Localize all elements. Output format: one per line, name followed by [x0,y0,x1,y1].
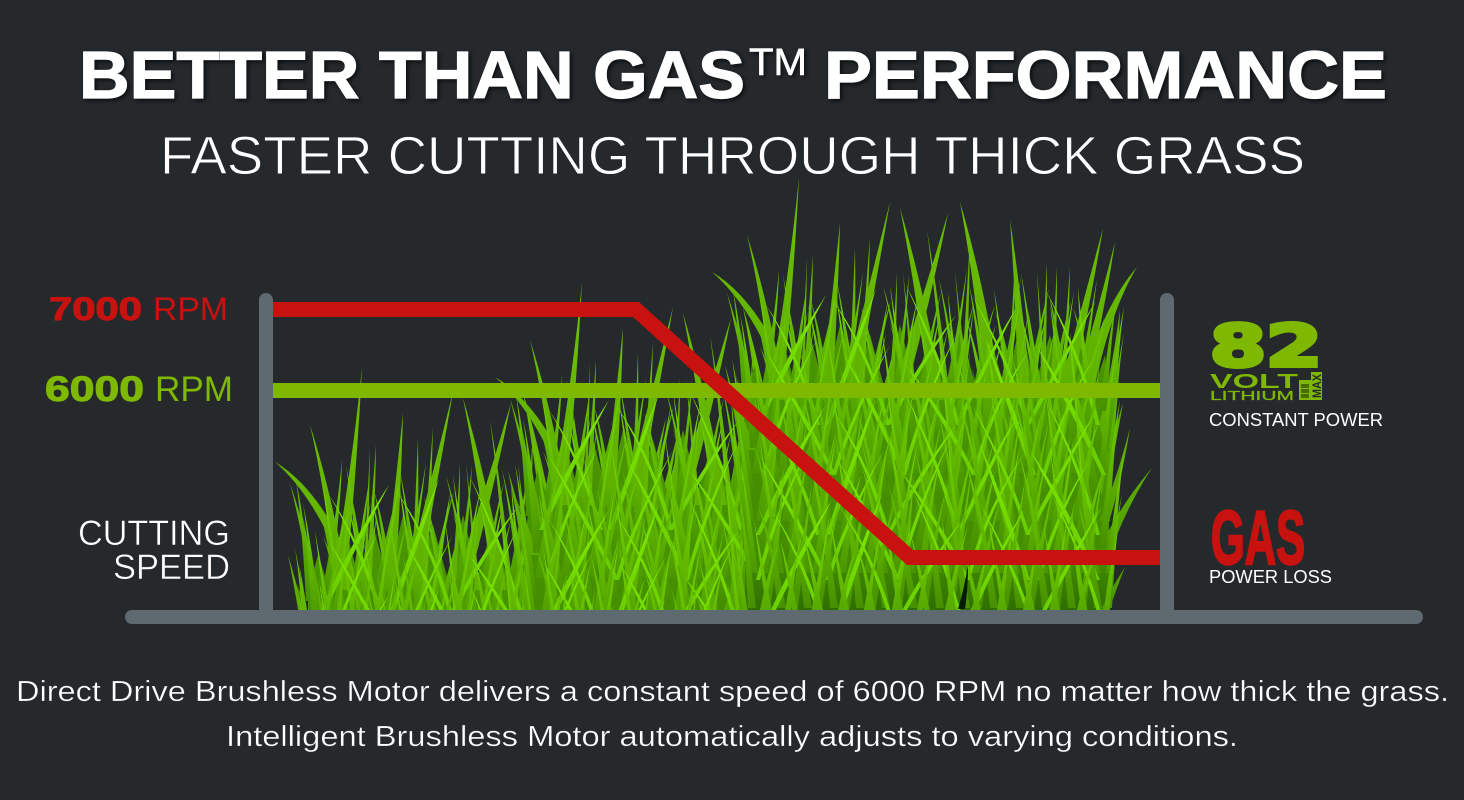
chart axes [125,293,1423,624]
body text: Direct Drive Brushless Motor delivers a constant speed of 6000 RPM no matter how thick the grass. [16,676,1449,708]
label: 6000 RPM: RPM [155,370,233,409]
logo: 82 volt lithium max: LITHIUM [1210,388,1294,403]
grass illustration [275,178,1152,610]
line: gas power loss [273,302,1160,565]
label: cutting speed: CUTTING [78,514,230,553]
label: power loss: POWER LOSS [1209,567,1332,587]
label: gas: GAS [1211,496,1305,581]
logo: 82 volt lithium max: MAX [1310,374,1324,398]
title: TM [749,42,807,84]
logo: 82 volt lithium max [1210,312,1324,403]
body text [16,676,1449,753]
label: 6000 RPM [45,370,233,409]
label: 7000 RPM [49,291,228,327]
logo: 82 volt lithium max: 82 [1210,312,1322,380]
label: 6000 RPM: 6000 [45,370,144,409]
line: 82V constant 6000 RPM [273,383,1160,398]
title: PERFORMANCE [824,38,1387,113]
label: cutting speed: SPEED [113,548,230,587]
label: cutting speed [78,514,230,587]
title: BETTER THAN GAS [79,38,745,113]
title [79,38,1387,113]
label: constant power: CONSTANT POWER [1209,410,1383,430]
body text: Intelligent Brushless Motor automatically adjusts to varying conditions. [226,721,1238,753]
logo: 82 volt lithium max: VOLT [1210,371,1298,393]
label: 7000 RPM: RPM [153,291,228,327]
subtitle: FASTER CUTTING THROUGH THICK GRASS [160,126,1305,186]
label: 7000 RPM: 7000 [49,291,142,327]
